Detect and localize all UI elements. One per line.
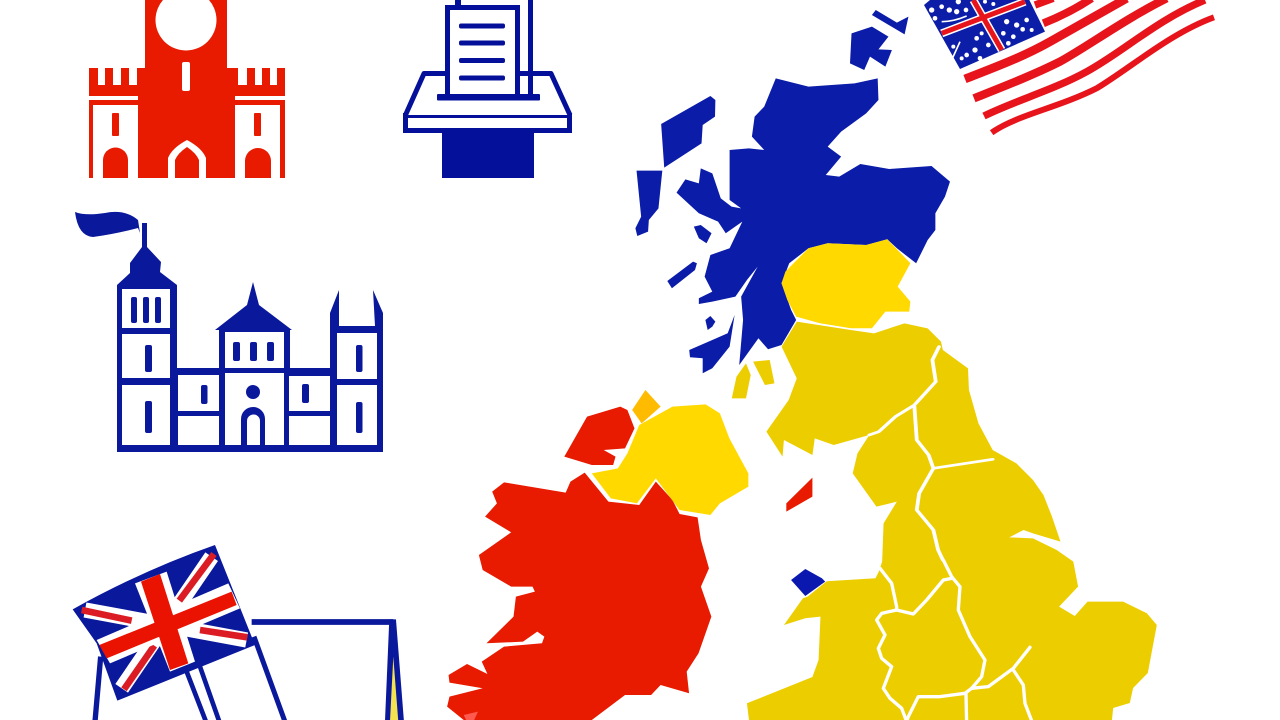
island: Isle of Man [786, 478, 812, 512]
region: England and Wales [732, 322, 1157, 720]
Union flag [73, 545, 255, 701]
region: Scotland and islands [635, 10, 950, 373]
region: Ireland [447, 390, 825, 720]
icon: red castle [89, 0, 285, 178]
icon: waving hybrid flag [924, 0, 1214, 133]
ballot box outline [95, 619, 404, 720]
icon: ballot box [406, 0, 570, 178]
icon: blue cathedral with flag [75, 212, 383, 452]
icon: ballot box with Union flag [73, 545, 404, 720]
island: Anglesey [791, 569, 825, 596]
region: Scottish Borders [782, 239, 910, 328]
map: Great Britain and Ireland [447, 10, 1157, 720]
